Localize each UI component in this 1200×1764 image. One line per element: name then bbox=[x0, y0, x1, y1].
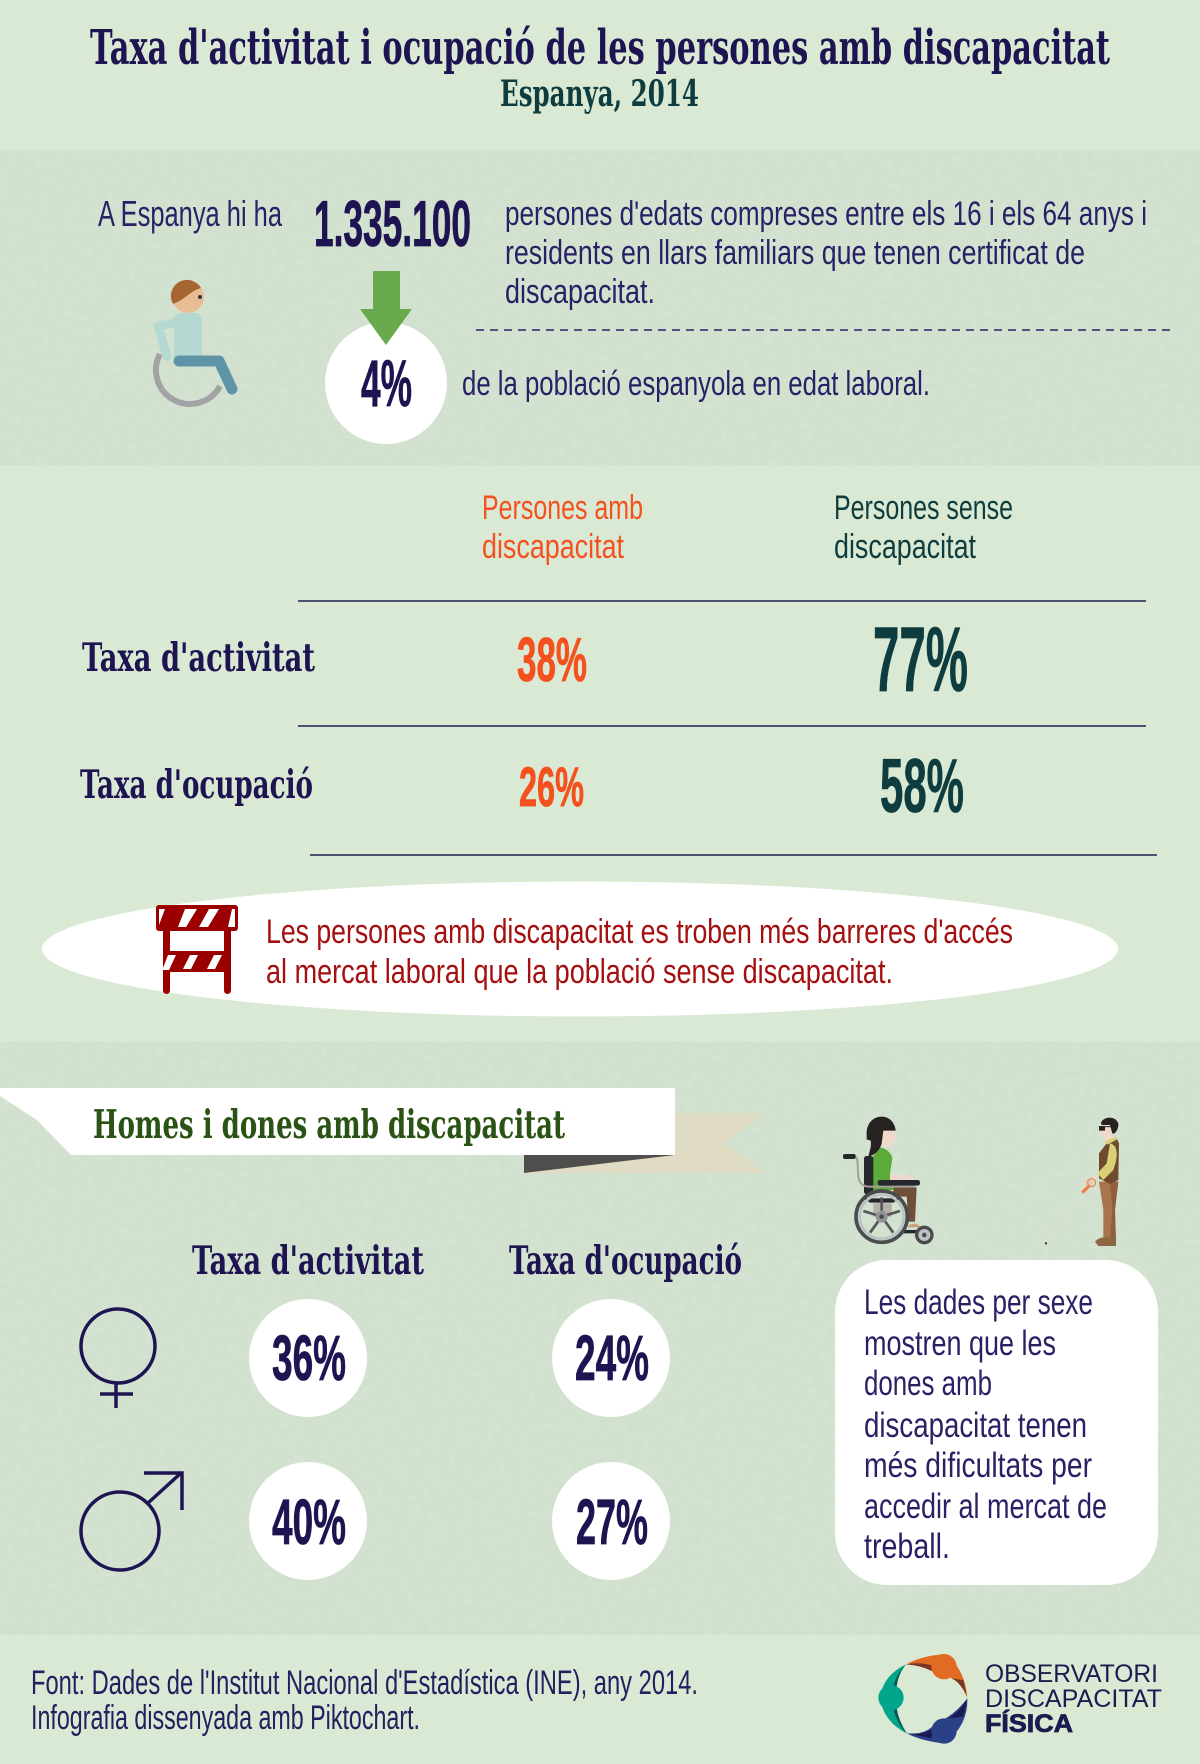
column heading: activity: Taxa d'activitat bbox=[192, 1238, 424, 1284]
logo mark bbox=[878, 1654, 967, 1744]
icon: road barrier bbox=[156, 905, 238, 994]
banner heading: Homes i dones amb discapacitat bbox=[93, 1102, 565, 1148]
value 58: 58% bbox=[880, 744, 964, 829]
banner heading bbox=[0, 1088, 765, 1173]
textured band: men and women bbox=[0, 1042, 1200, 1635]
callout text: Les persones amb discapacitat es troben més barreres d'accés bbox=[266, 913, 1013, 951]
icon: person in wheelchair bbox=[156, 280, 232, 404]
value: men employment bbox=[552, 1462, 670, 1580]
callout text bbox=[266, 913, 1013, 991]
callout text: al mercat laboral que la població sense discapacitat. bbox=[266, 953, 893, 991]
icon: woman in wheelchair bbox=[843, 1117, 934, 1244]
value 77: 77% bbox=[873, 609, 968, 711]
logo text: DISCAPACITAT bbox=[985, 1685, 1162, 1713]
logo text: OBSERVATORI bbox=[985, 1660, 1158, 1688]
subtitle: Espanya, 2014 bbox=[500, 73, 699, 115]
icon: female symbol bbox=[81, 1309, 155, 1408]
value: men activity: 40% bbox=[272, 1486, 346, 1558]
description text: discapacitat. bbox=[505, 273, 655, 311]
logo: Observatori Discapacitat Física bbox=[878, 1654, 1162, 1744]
description text bbox=[505, 195, 1147, 311]
logo text: FÍSICA bbox=[985, 1709, 1073, 1738]
big number: 1.335.100 bbox=[314, 187, 471, 260]
callout: women text: dones amb bbox=[864, 1364, 992, 1403]
value: women employment: 24% bbox=[575, 1322, 649, 1394]
column header: with disability: discapacitat bbox=[482, 528, 624, 566]
callout: women text: discapacitat tenen bbox=[864, 1406, 1087, 1445]
row label: employment: Taxa d'ocupació bbox=[80, 762, 313, 808]
callout: women text: accedir al mercat de bbox=[864, 1487, 1107, 1526]
value: men activity bbox=[249, 1462, 367, 1580]
value: men employment: 27% bbox=[576, 1486, 648, 1558]
value: women employment bbox=[552, 1299, 670, 1417]
panel: population bbox=[98, 187, 1170, 444]
column header: without disability: discapacitat bbox=[834, 528, 976, 566]
share text: de la població espanyola en edat laboral. bbox=[462, 365, 930, 403]
row label: activity: Taxa d'activitat bbox=[82, 635, 315, 681]
column heading: employment: Taxa d'ocupació bbox=[509, 1238, 742, 1284]
icon: male symbol bbox=[81, 1473, 182, 1570]
column header: without disability: Persones sense bbox=[834, 489, 1013, 527]
callout: barriers bbox=[42, 882, 1118, 1016]
value 38: 38% bbox=[517, 626, 587, 695]
callout: women text: Les dades per sexe bbox=[864, 1283, 1093, 1322]
source text: Infografia dissenyada amb Piktochart. bbox=[31, 1699, 420, 1737]
intro text: A Espanya hi ha bbox=[98, 193, 283, 234]
callout: women text: treball. bbox=[864, 1527, 950, 1566]
value: women activity bbox=[249, 1299, 367, 1417]
column header: without disability bbox=[834, 489, 1013, 566]
panel: comparison table bbox=[80, 489, 1157, 855]
circle with 4 percent: 4% bbox=[361, 346, 412, 420]
callout: women text: més dificultats per bbox=[864, 1446, 1092, 1485]
panel: men and women rates bbox=[81, 1238, 742, 1580]
value: women activity: 36% bbox=[272, 1322, 346, 1394]
column header: with disability bbox=[482, 489, 643, 566]
callout: women text: mostren que les bbox=[864, 1324, 1056, 1363]
source text: Font: Dades de l'Institut Nacional d'Estadística (INE), any 2014. bbox=[31, 1664, 698, 1702]
arrow down bbox=[360, 271, 412, 345]
icon: man with white cane bbox=[1045, 1118, 1119, 1246]
logo text bbox=[985, 1660, 1162, 1738]
source text bbox=[31, 1664, 698, 1737]
column header: with disability: Persones amb bbox=[482, 489, 643, 527]
value 26: 26% bbox=[519, 755, 584, 818]
callout: women text bbox=[835, 1260, 1158, 1585]
textured band: population bbox=[0, 150, 1200, 465]
circle with 4 percent bbox=[325, 322, 447, 444]
